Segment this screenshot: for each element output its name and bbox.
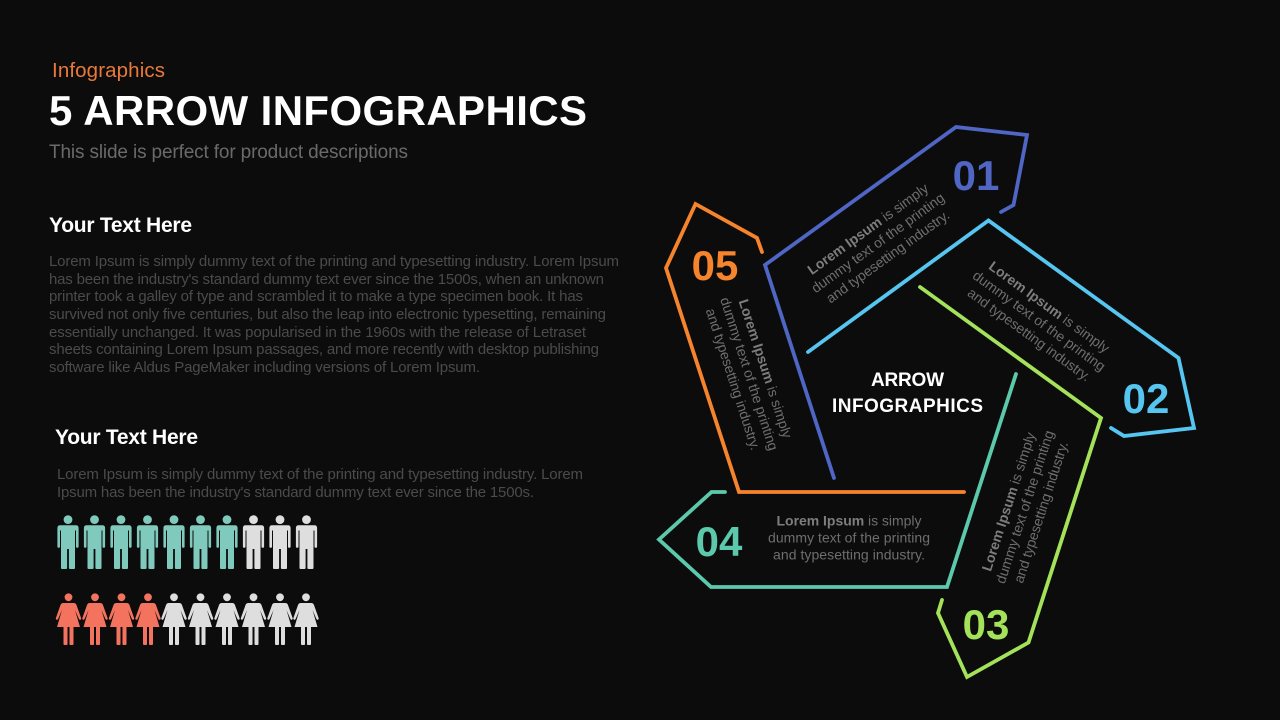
eyebrow: Infographics: Infographics [52,59,165,82]
arrow outline 02 [808,220,1194,436]
text block: first paragraph: software like Aldus PageMaker including versions of Lorem Ipsum. [49,359,480,376]
arrow 05 text [701,290,798,458]
arrow 04 text: Lorem Ipsum is simply [776,512,922,528]
text block: first paragraph: Lorem Ipsum is simply dummy text of the printing and typesetting industry. Lorem Ipsum [49,253,619,270]
arrow 01 text: dummy text of the printing [808,189,947,296]
arrow 01 text: and typesetting industry. [823,207,952,306]
arrow 02 text: and typesetting industry. [965,284,1094,384]
arrow outline 03 [920,287,1101,677]
arrow 03 [920,287,1101,677]
arrow 02 text: dummy text of the printing [970,267,1109,374]
text block: second paragraph: Lorem Ipsum is simply dummy text of the printing and typesetting industry. Lorem [57,466,583,483]
arrow 04 text [768,512,930,562]
center label: ARROW [871,370,944,391]
arrow 04 text: dummy text of the printing [768,530,930,546]
arrow 05 text: and typesetting industry. [703,306,764,452]
number 04: 04 [696,518,743,565]
arrow 05 text: Lorem Ipsum is simply [736,297,796,440]
arrow 04 [659,374,1016,587]
arrow 05 [666,204,964,492]
heading: second text block: Your Text Here [55,426,198,449]
center label: INFOGRAPHICS [832,396,983,417]
arrow 01 [765,127,1027,478]
number 01: 01 [953,152,999,199]
arrow 01 text: Lorem Ipsum is simply [804,180,931,278]
text block: first paragraph: printer took a galley of type and scrambled it to make a type specimen book. It has [49,288,583,305]
text block: first paragraph: has been the industry's standard dummy text ever since the 1500s, when an unknown [49,271,604,288]
arrow 02 text [960,253,1119,388]
text block: first paragraph [49,253,619,376]
text block: second paragraph [57,466,583,501]
arrow 04 text: and typesetting industry. [773,546,925,562]
text block: first paragraph: essentially unchanged. It was popularised in the 1960s with the release of Letraset [49,324,587,341]
arrow outline 05 [666,204,964,492]
arrow 05 text: dummy text of the printing [717,295,782,452]
icon row: female pictograms, 4 of 10 highlighted [56,593,319,645]
text block: first paragraph: survived not only five centuries, but also the leap into electronic typesetting, remaining [49,306,606,323]
heading: first text block: Your Text Here [49,214,192,237]
arrow 01 text [798,176,957,310]
subtitle: This slide is perfect for product descriptions [49,142,408,163]
number 02: 02 [1123,375,1169,422]
arrow outline 01 [765,127,1027,478]
number 03: 03 [963,601,1009,648]
number 05: 05 [692,242,738,289]
arrow 03 text: and typesetting industry. [1010,439,1071,585]
arrow 02 text: Lorem Ipsum is simply [986,258,1113,356]
arrow 03 text: dummy text of the printing [992,428,1057,585]
title: 5 ARROW INFOGRAPHICS [49,87,587,134]
text block: second paragraph: Ipsum has been the industry's standard dummy text ever since the 1500s. [57,484,534,501]
arrow 02 [808,220,1194,436]
text block: first paragraph: sheets containing Lorem Ipsum passages, and more recently with desktop publishing [49,341,599,358]
icon row: male pictograms, 7 of 10 highlighted [57,515,317,569]
arrow 03 text [976,423,1073,591]
arrow 03 text: Lorem Ipsum is simply [978,430,1038,573]
center label [832,370,983,417]
arrow outline 04 [659,374,1016,587]
